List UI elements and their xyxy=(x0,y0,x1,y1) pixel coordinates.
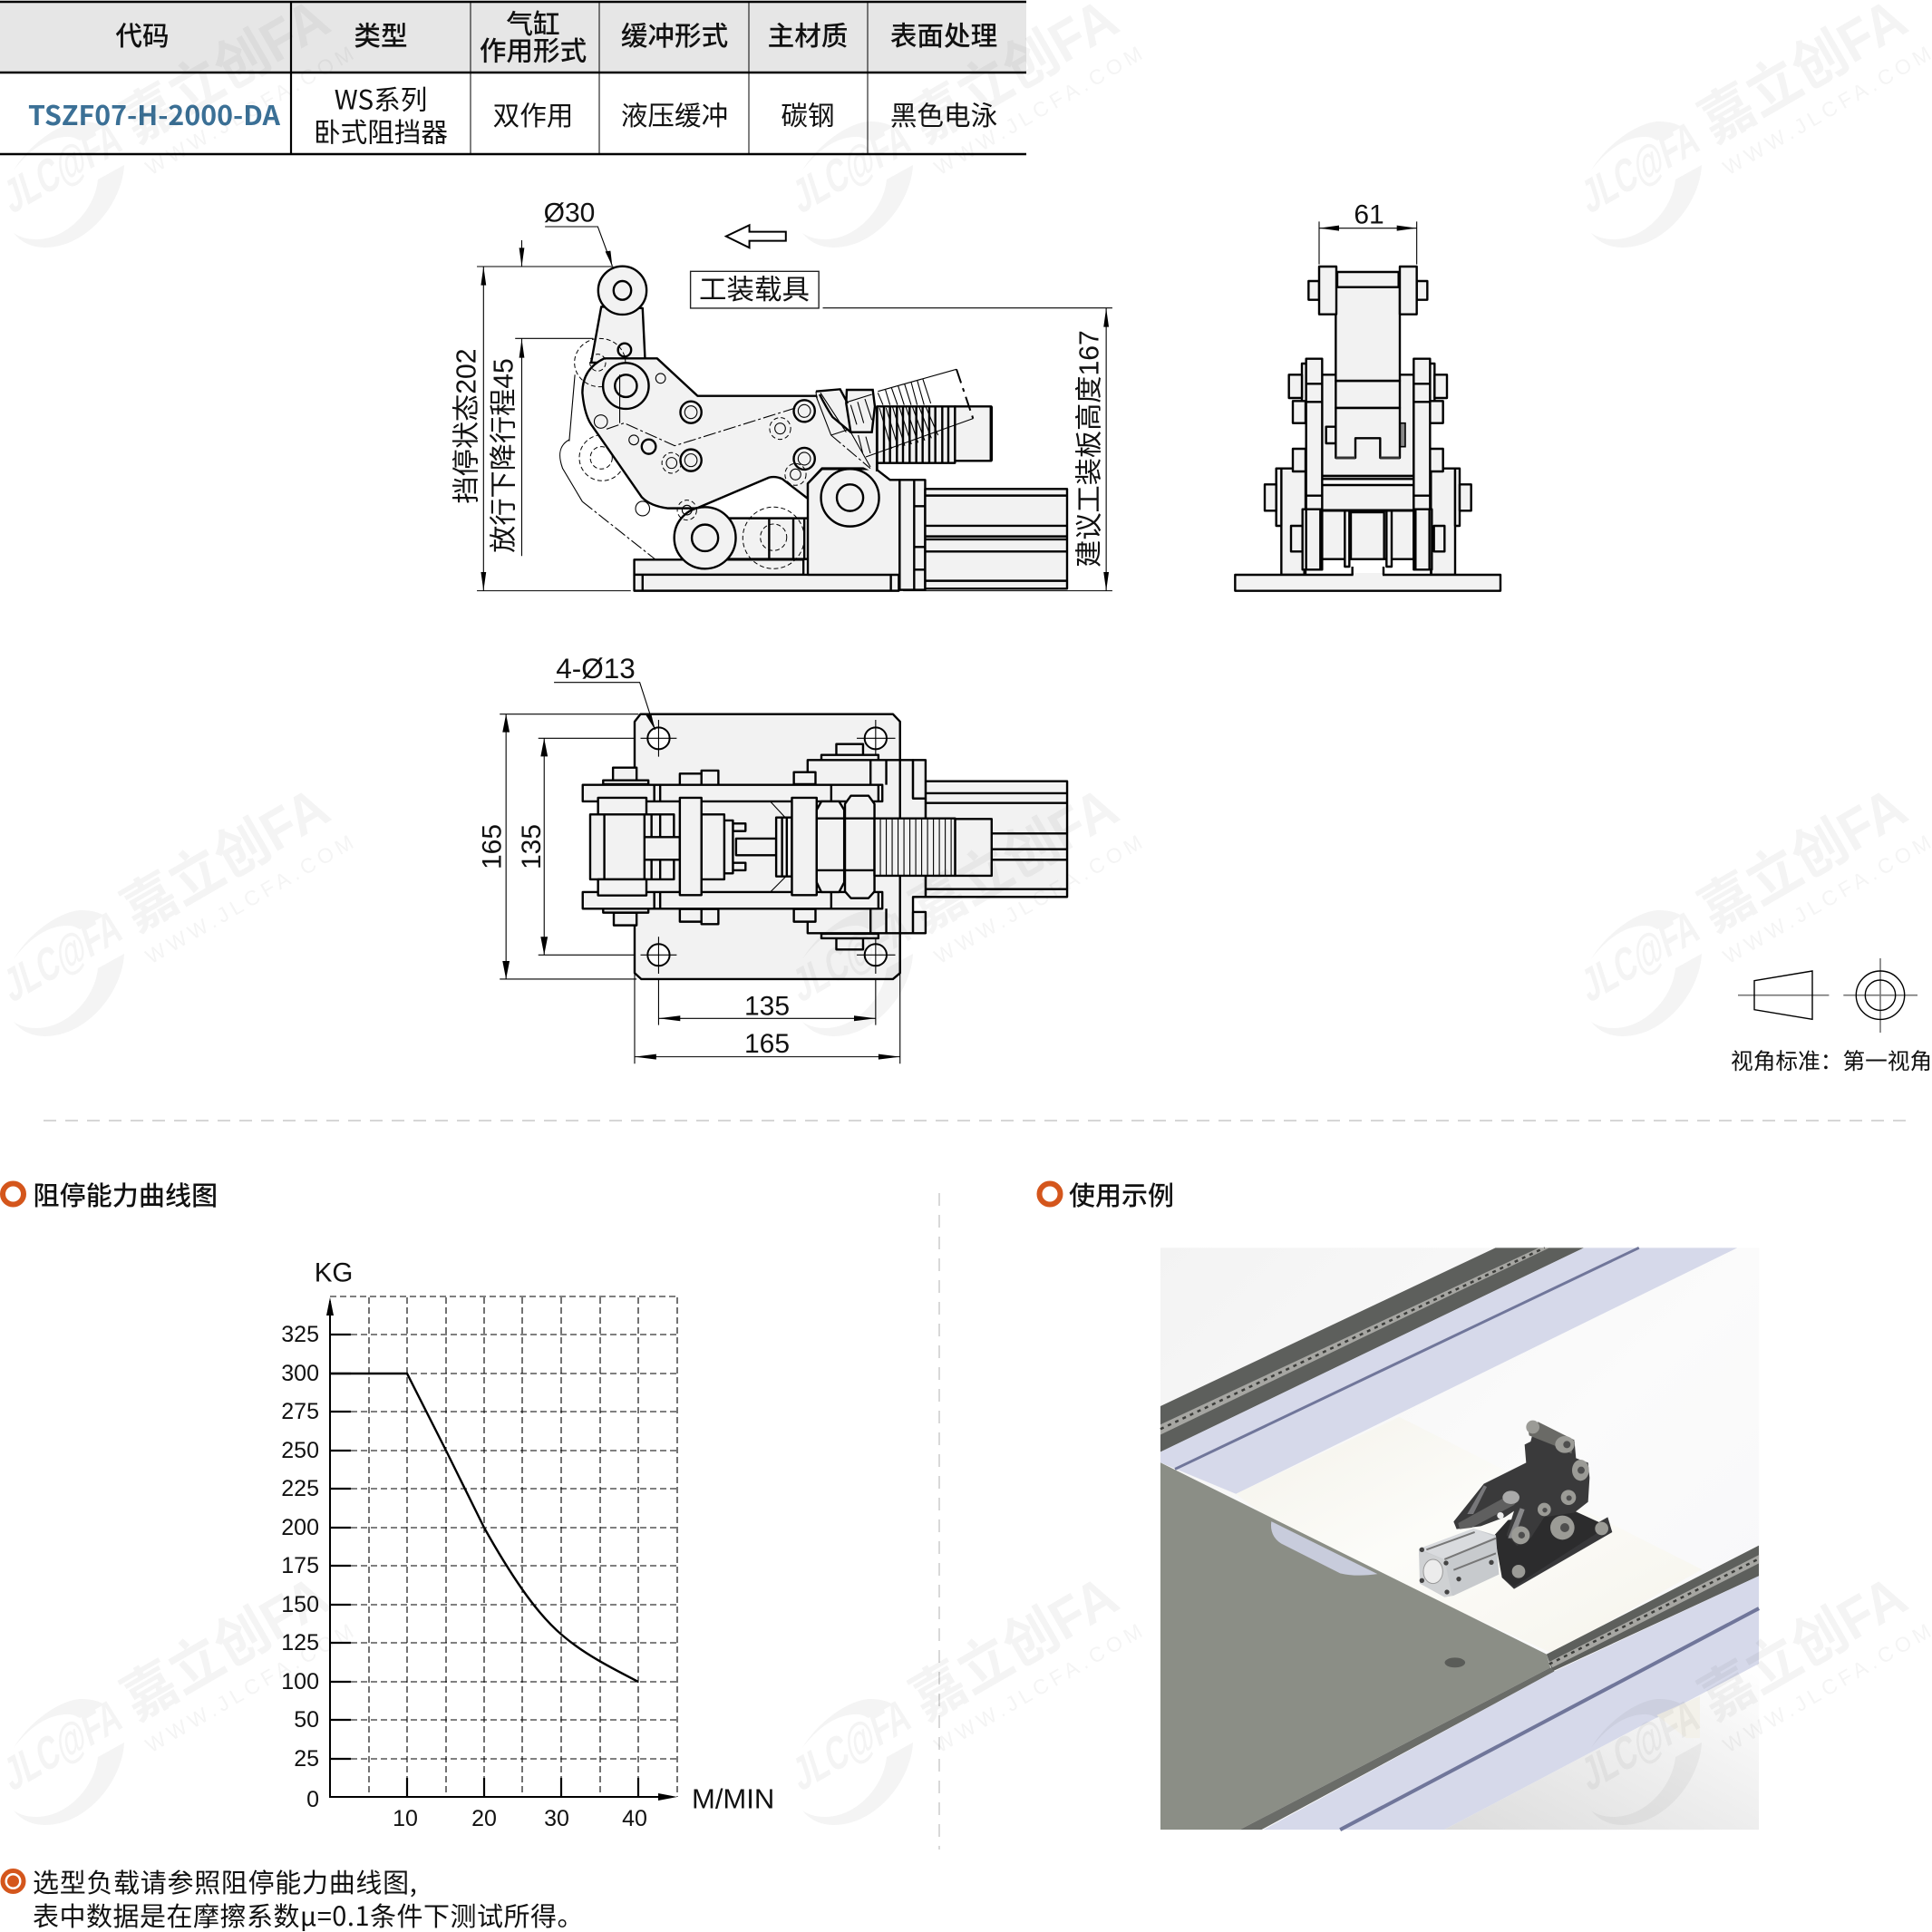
dimension: hole spacing 135: 135 xyxy=(517,824,547,869)
dimension: Ø30: Ø30 xyxy=(544,198,595,228)
dimension: recommended plate height 167: 建议工装板高度167 xyxy=(1073,330,1104,568)
x axis labels: 30 xyxy=(544,1806,569,1831)
table header row: 作用形式 xyxy=(480,29,587,69)
y axis labels: 0 xyxy=(306,1787,319,1812)
y axis labels: 300 xyxy=(281,1361,319,1386)
table header row xyxy=(115,3,997,69)
table data row: WS系列 xyxy=(335,78,427,118)
y axis labels: 225 xyxy=(281,1476,319,1501)
x axis labels: 20 xyxy=(471,1806,497,1831)
y axis labels: 325 xyxy=(281,1322,319,1347)
nuts and threaded rod xyxy=(816,369,991,471)
dimension: release stroke 45: 放行下降行程45 xyxy=(488,358,519,553)
table header row: 主材质 xyxy=(768,15,848,53)
watermarks: WWW.JLCFA.COM xyxy=(930,1619,1146,1757)
table data row: 黑色电泳 xyxy=(890,94,997,133)
table data row: 液压缓冲 xyxy=(621,94,728,133)
watermarks: 嘉立创FA xyxy=(1689,776,1917,943)
watermarks: 嘉立创FA xyxy=(1689,1565,1917,1732)
watermarks: JLC@FA xyxy=(1576,898,1704,1013)
x axis title: M/MIN xyxy=(692,1782,774,1815)
watermarks: 嘉立创FA xyxy=(900,776,1129,943)
watermarks: JLC@FA xyxy=(0,110,127,224)
section divider xyxy=(44,1120,1913,1121)
watermarks: JLC@FA xyxy=(0,1687,127,1801)
bolts xyxy=(1511,1421,1608,1578)
heading: stopping capacity curve: 阻停能力曲线图 xyxy=(33,1175,218,1213)
y axis title: KG xyxy=(315,1258,353,1287)
table header row: 气缸 xyxy=(506,3,560,42)
caption: view standard: 视角标准：第一视角 xyxy=(1731,1044,1932,1076)
watermarks: WWW.JLCFA.COM xyxy=(930,830,1146,968)
y axis labels: 175 xyxy=(281,1553,319,1578)
watermarks: JLC@FA xyxy=(0,898,127,1013)
table header row: 代码 xyxy=(115,15,170,53)
y axis labels: 250 xyxy=(281,1438,319,1463)
dimension: width 61: 61 xyxy=(1354,199,1384,230)
note: selection guidance: 选型负载请参照阻停能力曲线图, xyxy=(33,1862,418,1900)
watermarks: 嘉立创FA xyxy=(112,1565,340,1732)
watermarks: 嘉立创FA xyxy=(112,776,340,943)
table data row: 碳钢 xyxy=(781,94,835,133)
stopping capacity curve xyxy=(330,1374,638,1682)
dimension: height 165: 165 xyxy=(477,824,508,869)
column divider xyxy=(938,1193,940,1849)
table data row: 卧式阻挡器 xyxy=(314,111,448,150)
icon: first-angle projection symbol xyxy=(1738,958,1917,1033)
table data row xyxy=(28,78,997,150)
dimension: 4-Ø13 holes: 4-Ø13 xyxy=(556,652,636,684)
watermarks: JLC@FA xyxy=(787,1687,916,1801)
table: product specification xyxy=(0,2,1026,154)
photo illustration: stopper on conveyor xyxy=(1160,1248,1759,1830)
watermarks: 嘉立创FA xyxy=(900,1565,1129,1732)
table data row: 双作用 xyxy=(493,94,573,133)
x axis labels: 10 xyxy=(393,1806,418,1831)
label: fixture carrier: 工装载具 xyxy=(699,275,810,306)
table header row: 表面处理 xyxy=(890,15,997,53)
watermarks: JLC@FA xyxy=(1576,1687,1704,1801)
front view drawing xyxy=(1235,199,1500,591)
x axis labels: 40 xyxy=(622,1806,647,1831)
watermarks: JLC@FA xyxy=(787,110,916,224)
y axis labels: 275 xyxy=(281,1399,319,1424)
line chart: stopping capacity vs speed xyxy=(281,1258,774,1831)
x axis labels xyxy=(393,1806,647,1831)
table data row: TSZF07-H-2000-DA xyxy=(28,94,281,133)
cylinder xyxy=(1419,1529,1499,1597)
watermarks: WWW.JLCFA.COM xyxy=(1719,1619,1932,1757)
y axis labels: 100 xyxy=(281,1669,319,1694)
watermarks: WWW.JLCFA.COM xyxy=(141,830,357,968)
side view drawing xyxy=(451,198,1112,591)
dimension: stop height 202: 挡停状态202 xyxy=(451,348,482,504)
y axis labels: 50 xyxy=(294,1707,319,1733)
device: black stopper with cylinder xyxy=(1419,1421,1612,1597)
dimension: bottom width 165: 165 xyxy=(744,1029,790,1059)
watermarks: JLC@FA xyxy=(787,898,916,1013)
y axis labels: 125 xyxy=(281,1630,319,1655)
note: selection guidance xyxy=(3,1862,584,1932)
table header row: 类型 xyxy=(354,15,408,53)
heading: usage example: 使用示例 xyxy=(1069,1175,1174,1213)
y axis labels: 200 xyxy=(281,1515,319,1540)
y axis labels: 150 xyxy=(281,1592,319,1617)
watermarks: WWW.JLCFA.COM xyxy=(141,1619,357,1757)
watermarks: WWW.JLCFA.COM xyxy=(141,42,357,180)
watermarks: JLC@FA xyxy=(1576,110,1704,224)
dimension: bottom hole spacing 135: 135 xyxy=(744,992,790,1021)
watermarks: WWW.JLCFA.COM xyxy=(1719,830,1932,968)
y axis labels: 25 xyxy=(294,1746,319,1772)
y axis labels xyxy=(281,1322,319,1812)
watermarks: WWW.JLCFA.COM xyxy=(930,42,1146,180)
top view drawing xyxy=(477,652,1067,1063)
table header row: 缓冲形式 xyxy=(621,15,728,53)
watermarks: WWW.JLCFA.COM xyxy=(1719,42,1932,180)
